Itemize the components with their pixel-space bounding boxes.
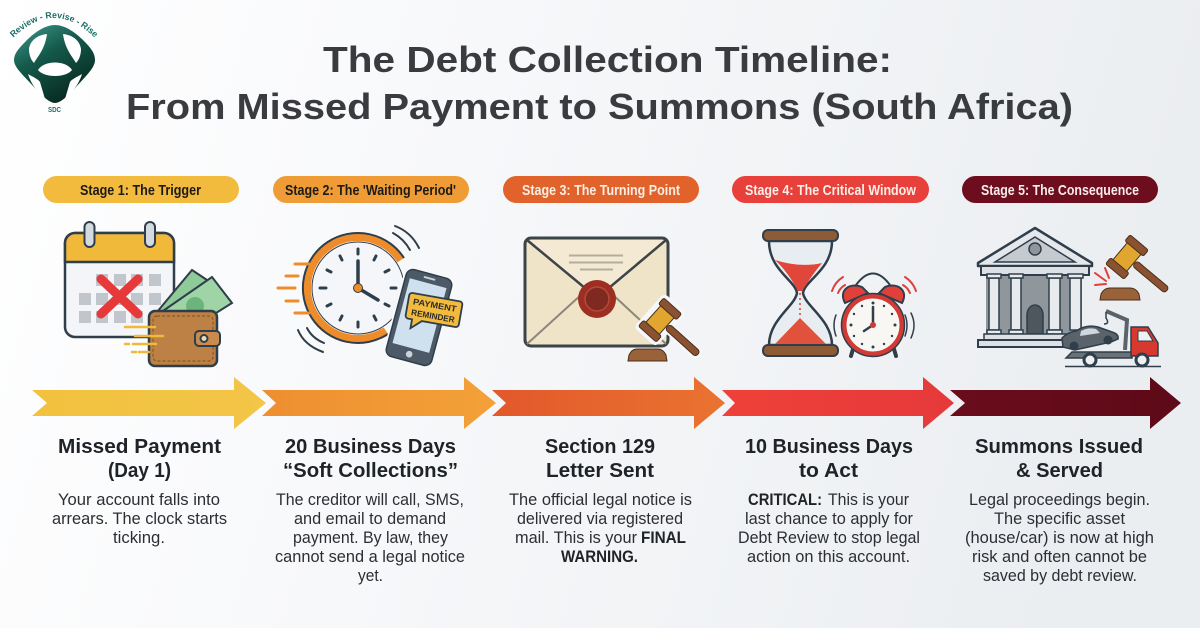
icon: clock and phone xyxy=(278,226,463,367)
arrow 5 xyxy=(950,377,1181,429)
logo xyxy=(10,12,97,114)
stage 4 text: 10 Business Days xyxy=(745,436,913,458)
logo: Review - Revise - Rise xyxy=(10,12,97,38)
logo: SDC xyxy=(48,107,61,114)
icon: clock and phone: REMINDER xyxy=(410,307,455,325)
stage 3 text xyxy=(509,436,692,566)
icon: courthouse, gavel and tow truck xyxy=(978,228,1179,366)
stage 5 pill xyxy=(962,176,1158,203)
stage 1 text: ticking. xyxy=(113,529,165,547)
stage 4 text: last chance to apply for xyxy=(745,510,913,528)
stage 3 pill: Stage 3: The Turning Point xyxy=(522,182,680,199)
stage 2 text: and email to demand xyxy=(294,510,446,528)
stage 2 pill xyxy=(273,176,469,203)
stage 5 text: Summons Issued xyxy=(975,436,1143,458)
stage 4 pill: Stage 4: The Critical Window xyxy=(745,182,916,199)
stage 5 text: The specific asset xyxy=(994,510,1125,528)
title: From Missed Payment to Summons (South Africa) xyxy=(126,86,1073,127)
panel: stage 4 xyxy=(722,176,954,566)
panel: stage 2 xyxy=(262,176,496,585)
stage 4 text: to Act xyxy=(799,460,858,482)
stage 3 text: WARNING. xyxy=(561,548,638,566)
stage 2 text: “Soft Collections” xyxy=(283,460,458,482)
stage 5 text: (house/car) is now at high xyxy=(965,529,1154,547)
stage 5 text: Legal proceedings begin. xyxy=(969,491,1150,509)
stage 4 text: action on this account. xyxy=(747,548,910,566)
stage 3 text: FINAL xyxy=(641,529,686,547)
stage 4 text: Debt Review to stop legal xyxy=(738,529,920,547)
stage 1 text: arrears. The clock starts xyxy=(52,510,227,528)
stage 3 text: Letter Sent xyxy=(546,460,654,482)
icon: hourglass and alarm clock xyxy=(763,230,916,356)
stage 2 text xyxy=(275,436,465,585)
stage 1 text: Your account falls into xyxy=(58,491,220,509)
stage 5 text: saved by debt review. xyxy=(983,567,1137,585)
stage 2 text: payment. By law, they xyxy=(293,529,449,547)
icon: calendar and wallet xyxy=(65,222,232,366)
stage 2 pill: Stage 2: The 'Waiting Period' xyxy=(285,182,456,199)
stage 3 text: delivered via registered xyxy=(517,510,683,528)
stage 3 pill xyxy=(503,176,699,203)
stage 1 text xyxy=(52,436,227,547)
arrow 1 xyxy=(32,377,266,429)
stage 3 text: The official legal notice is xyxy=(509,491,692,509)
arrow 4 xyxy=(722,377,954,429)
stage 5 text xyxy=(965,436,1154,585)
stage 4 text: This is your xyxy=(828,491,909,509)
stage 3 text: mail. This is your xyxy=(515,529,637,547)
icon: sealed envelope and gavel xyxy=(525,238,713,370)
stage 4 text: CRITICAL: xyxy=(748,491,822,509)
stage 1 text: Missed Payment xyxy=(58,436,221,458)
stage 1 pill xyxy=(43,176,239,203)
stage 2 text: cannot send a legal notice xyxy=(275,548,465,566)
icon: clock and phone: PAYMENT xyxy=(412,296,458,314)
stage 1 pill: Stage 1: The Trigger xyxy=(80,182,201,199)
arrow 2 xyxy=(262,377,496,429)
stage 2 text: The creditor will call, SMS, xyxy=(276,491,464,509)
stage 5 pill: Stage 5: The Consequence xyxy=(981,182,1139,199)
panel: stage 3 xyxy=(492,176,725,566)
title xyxy=(126,39,1073,127)
stage 2 text: 20 Business Days xyxy=(285,436,456,458)
title: The Debt Collection Timeline: xyxy=(323,39,892,80)
arrow 3 xyxy=(492,377,725,429)
stage 4 pill xyxy=(732,176,929,203)
stage 3 text: Section 129 xyxy=(545,436,655,458)
stage 5 text: risk and often cannot be xyxy=(972,548,1147,566)
panel: stage 1 xyxy=(32,176,266,547)
stage 5 text: & Served xyxy=(1016,460,1103,482)
stage 1 text: (Day 1) xyxy=(108,460,171,482)
stage 2 text: yet. xyxy=(358,567,383,585)
panel: stage 5 xyxy=(950,176,1181,585)
stage 4 text xyxy=(738,436,920,566)
